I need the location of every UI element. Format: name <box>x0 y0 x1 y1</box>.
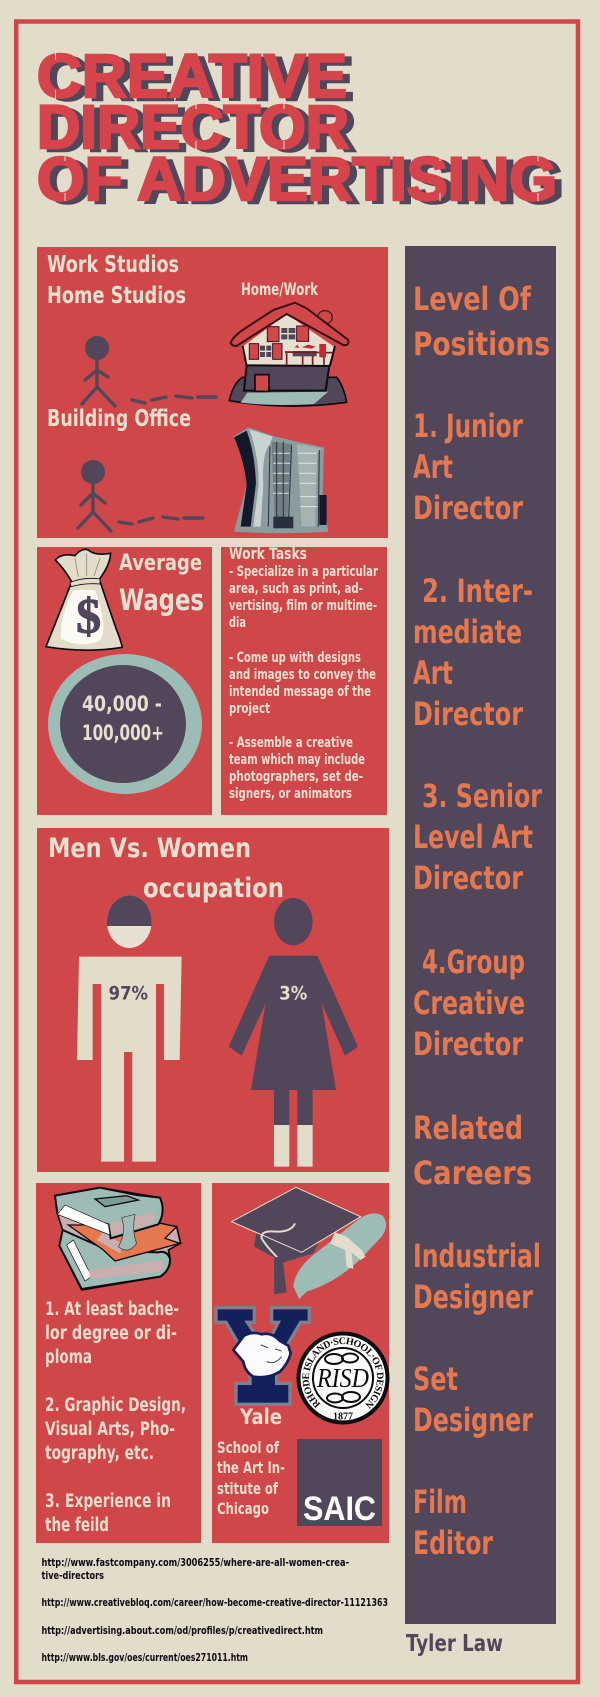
work tasks list: vertising, film or multime- <box>229 598 377 614</box>
work tasks heading: Work Tasks <box>229 544 307 563</box>
panel: level of positions and related careers <box>405 246 556 1624</box>
source links: tive-directors <box>42 1570 104 1582</box>
career: film editor: Editor <box>413 1524 493 1562</box>
career: film editor: Film <box>413 1483 467 1521</box>
requirements list: Visual Arts, Pho- <box>45 1419 175 1440</box>
position 3: Level Art <box>413 818 533 856</box>
school of the art institute label: the Art In- <box>217 1458 285 1477</box>
position 1: Director <box>413 489 523 527</box>
icon: house <box>229 303 348 406</box>
panel: work tasks <box>221 544 387 815</box>
source links: http://advertising.about.com/od/profiles/p/creativedirect.htm <box>42 1625 323 1637</box>
title: CREATIVE <box>44 45 354 113</box>
career: set designer <box>413 1360 533 1439</box>
men vs women heading: occupation <box>143 873 284 904</box>
logo: RISD seal: RISD <box>316 1363 369 1393</box>
position 1: 1. Junior <box>413 407 523 445</box>
work tasks list: and images to convey the <box>229 667 376 683</box>
work tasks list: dia <box>229 615 246 631</box>
level of positions heading: Level Of <box>413 280 532 318</box>
panel: work locations <box>37 247 388 538</box>
logo: RISD seal: 1877 <box>333 1412 353 1422</box>
requirements list: lor degree or di- <box>45 1323 177 1344</box>
wages heading <box>119 551 204 617</box>
title: DIRECTOR <box>37 93 349 161</box>
work location labels <box>47 252 191 432</box>
icon: man figure 97%: 97% <box>109 982 148 1004</box>
work location labels: Building Office <box>47 406 191 432</box>
icon: man figure 97% <box>77 895 182 1162</box>
career: film editor <box>413 1483 493 1562</box>
position 4: Director <box>413 1025 523 1063</box>
school of the art institute label: School of <box>217 1438 280 1457</box>
work tasks list: signers, or animators <box>229 786 352 802</box>
work tasks list: intended message of the <box>229 684 371 700</box>
wage range circle: 40,000 - <box>82 692 162 716</box>
title: DIRECTOR <box>44 96 356 164</box>
wage range circle: 100,000+ <box>82 721 164 745</box>
requirements list: the feild <box>45 1515 109 1536</box>
requirements list: ploma <box>45 1347 92 1368</box>
icon: woman figure 3% <box>229 898 358 1167</box>
position 2 <box>413 572 533 733</box>
panel: education requirements <box>36 1183 201 1543</box>
career: industrial designer: Designer <box>413 1278 533 1316</box>
title: OF ADVERTISING <box>44 148 564 216</box>
school of the art institute label: Chicago <box>217 1499 269 1518</box>
work tasks list: photographers, set de- <box>229 769 363 785</box>
wages heading: Wages <box>119 583 204 617</box>
wage range circle <box>48 654 202 794</box>
work tasks list: - Assemble a creative <box>229 735 353 751</box>
source links <box>42 1557 388 1664</box>
work location labels: Home Studios <box>47 283 186 309</box>
icon: stick figure to office <box>78 460 203 531</box>
position 2: 2. Inter- <box>422 572 533 610</box>
position 3: 3. Senior <box>422 777 542 815</box>
panel: men vs women <box>37 828 389 1172</box>
position 4 <box>413 943 525 1063</box>
position 1 <box>413 407 523 527</box>
level of positions heading: Positions <box>413 325 550 363</box>
work tasks list: area, such as print, ad- <box>229 581 363 597</box>
source links: http://www.fastcompany.com/3006255/where-are-all-women-crea- <box>42 1557 349 1569</box>
level of positions heading <box>413 280 550 363</box>
logo: Yale <box>216 1308 309 1404</box>
position 2: Art <box>413 654 453 692</box>
logo: SAIC: SAIC <box>303 1490 376 1528</box>
men vs women heading <box>48 833 284 904</box>
related careers heading <box>413 1109 532 1192</box>
position 2: Director <box>413 695 523 733</box>
requirements list: 3. Experience in <box>45 1491 171 1512</box>
yale label: Yale <box>239 1405 282 1429</box>
icon: woman figure 3%: 3% <box>279 982 307 1004</box>
title <box>37 42 564 216</box>
panel: schools <box>212 1183 390 1543</box>
position 3 <box>413 777 542 897</box>
logo: SAIC <box>297 1439 382 1528</box>
related careers heading: Careers <box>413 1154 532 1192</box>
icon: money bag: $ <box>76 588 101 644</box>
source links: http://www.bls.gov/oes/current/oes271011.htm <box>42 1652 248 1664</box>
icon: book stack <box>55 1188 181 1290</box>
requirements list: tography, etc. <box>45 1443 154 1464</box>
position 4: Creative <box>413 984 525 1022</box>
career: industrial designer <box>413 1237 541 1316</box>
related careers heading: Related <box>413 1109 523 1147</box>
icon: stick figure to home <box>82 336 216 406</box>
career: set designer: Designer <box>413 1401 533 1439</box>
home/work label: Home/Work <box>241 280 319 299</box>
panel: average wages <box>37 547 212 815</box>
men vs women heading: Men Vs. Women <box>48 833 251 864</box>
requirements list: 1. At least bache- <box>45 1299 179 1320</box>
author credit: Tyler Law <box>406 1631 503 1657</box>
work tasks list <box>229 564 378 802</box>
logo: RISD seal: RHODE ISLAND·SCHOOL·OF DESIGN <box>302 1337 384 1409</box>
icon: office building <box>233 427 328 533</box>
work location labels: Work Studios <box>47 252 179 278</box>
title: OF ADVERTISING <box>37 145 557 213</box>
career: set designer: Set <box>413 1360 458 1398</box>
title: CREATIVE <box>37 42 347 110</box>
requirements list: 2. Graphic Design, <box>45 1395 186 1416</box>
work tasks list: project <box>229 701 270 717</box>
source links: http://www.creativebloq.com/career/how-become-creative-director-11121363 <box>42 1597 388 1609</box>
icon: money bag <box>46 549 122 650</box>
work tasks list: - Specialize in a particular <box>229 564 378 580</box>
work tasks list: team which may include <box>229 752 365 768</box>
work tasks list: - Come up with designs <box>229 650 361 666</box>
wages heading: Average <box>119 551 202 576</box>
career: industrial designer: Industrial <box>413 1237 541 1275</box>
requirements list <box>45 1299 186 1536</box>
position 4: 4.Group <box>422 943 525 981</box>
school of the art institute label <box>217 1438 285 1518</box>
icon: graduation cap and diploma <box>232 1187 386 1299</box>
school of the art institute label: stitute of <box>217 1479 279 1498</box>
position 2: mediate <box>413 613 522 651</box>
position 1: Art <box>413 448 453 486</box>
position 3: Director <box>413 859 523 897</box>
